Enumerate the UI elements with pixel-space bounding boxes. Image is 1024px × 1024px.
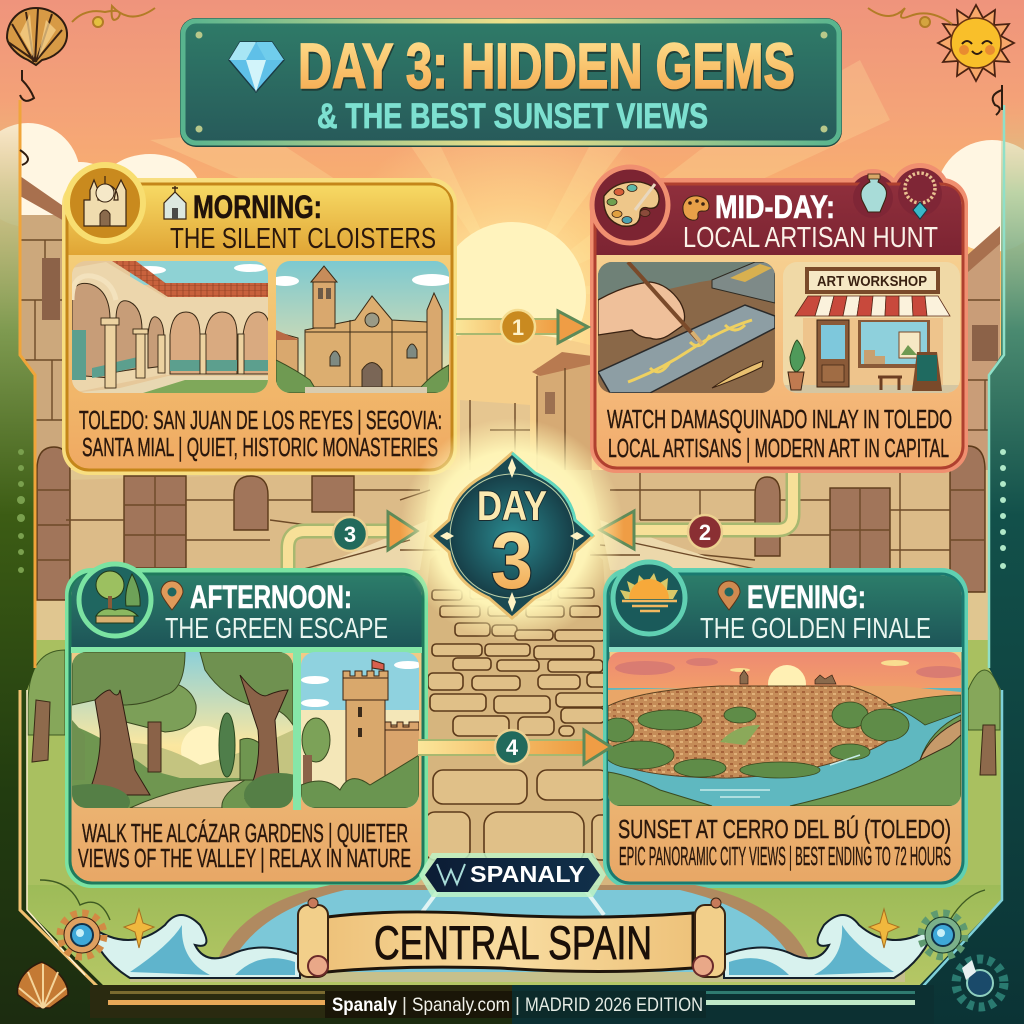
arrow 3 afternoon to centre <box>288 512 417 572</box>
decorative vine top right <box>868 8 1002 115</box>
arrow 4 afternoon to evening: 4 <box>506 735 519 760</box>
scroll banner: central spain: CENTRAL SPAIN <box>374 916 652 969</box>
caption <box>79 405 442 462</box>
arrow 4 afternoon to evening <box>418 730 611 764</box>
icon: small palette <box>683 196 709 220</box>
icon: shell bottom left <box>17 962 68 1008</box>
icon: smiling sun top right <box>938 5 1014 81</box>
image: inlay craft <box>598 262 775 393</box>
arrow 1 morning to mid-day <box>456 310 588 344</box>
image: church <box>271 261 452 393</box>
image: garden path <box>72 652 293 808</box>
image: cloister <box>72 261 273 393</box>
icon: palette badge <box>592 167 668 243</box>
icon: star right <box>869 909 899 948</box>
footer credits: | <box>515 995 520 1016</box>
waves right <box>724 915 936 978</box>
subtitle text: & THE BEST SUNSET VIEWS <box>317 97 708 136</box>
icon: necklace <box>905 173 935 219</box>
icon: cathedral badge <box>67 165 143 241</box>
panel: evening <box>602 562 968 888</box>
caption: SANTA MIAL | QUIET, HISTORIC MONASTERIES <box>82 432 438 462</box>
icon: gear right <box>922 914 964 956</box>
arrow 1 morning to mid-day: 1 <box>512 315 524 340</box>
arrow 2 mid-day to centre: 2 <box>699 520 711 545</box>
panel: morning: THE SILENT CLOISTERS <box>170 223 436 255</box>
water arcs behind banner <box>130 885 905 982</box>
arrow 2 mid-day to centre <box>600 472 793 549</box>
icon: gear bottom right <box>956 959 1004 1007</box>
image: castle tower <box>301 652 425 808</box>
frame: right border <box>915 100 1024 1024</box>
caption: WALK THE ALCÁZAR GARDENS | QUIETER <box>82 818 408 848</box>
centre badge: day 3 <box>400 418 624 642</box>
logo: spanaly badge <box>419 853 606 897</box>
footer credits: Spanaly <box>332 995 397 1016</box>
panel: afternoon <box>50 564 428 888</box>
heading: MORNING: <box>193 189 322 225</box>
panel: mid-day <box>590 163 968 473</box>
footer credits: Spanaly.com <box>412 995 510 1016</box>
footer credits: | <box>402 995 407 1016</box>
icon: map pin <box>161 581 183 610</box>
frame: bottom band <box>0 985 934 1024</box>
icon: map pin <box>718 581 740 610</box>
heading: MID-DAY: <box>715 189 835 225</box>
caption <box>78 818 411 873</box>
image: toledo panorama <box>602 652 964 806</box>
icon: trees badge <box>79 564 151 636</box>
icon: star left <box>124 909 154 948</box>
icon: scallop shell top left <box>7 8 67 65</box>
image: art workshop: ART WORKSHOP <box>817 273 927 290</box>
caption <box>618 814 951 871</box>
icon: diamond <box>229 42 284 92</box>
icon: gear left <box>61 914 103 956</box>
title text: DAY 3: HIDDEN GEMS <box>298 30 795 102</box>
panel: mid-day: LOCAL ARTISAN HUNT <box>683 222 938 254</box>
arrow 3 afternoon to centre: 3 <box>344 522 356 547</box>
centre badge: day 3: 3 <box>491 516 533 605</box>
heading: EVENING: <box>747 579 866 615</box>
panel: afternoon: THE GREEN ESCAPE <box>165 613 388 645</box>
image: art workshop <box>783 262 960 393</box>
title banner <box>180 18 842 147</box>
caption: TOLEDO: SAN JUAN DE LOS REYES | SEGOVIA: <box>79 405 442 435</box>
footer credits: MADRID 2026 EDITION <box>525 995 703 1016</box>
icon: sunset badge <box>613 562 685 634</box>
centre badge: day 3: DAY <box>477 482 547 529</box>
heading: AFTERNOON: <box>190 579 352 615</box>
panel: morning <box>62 165 457 475</box>
icon: vase <box>861 174 886 212</box>
frame: left border <box>0 100 108 1024</box>
scroll banner: central spain <box>298 898 725 977</box>
waves left <box>88 915 300 978</box>
caption <box>607 404 952 463</box>
icon: small church <box>164 186 186 219</box>
logo: spanaly badge: SPANALY <box>470 861 585 887</box>
footer credits <box>325 991 706 1018</box>
caption: VIEWS OF THE VALLEY | RELAX IN NATURE <box>78 843 411 873</box>
panel: evening: THE GOLDEN FINALE <box>700 613 931 645</box>
decorative vine top left <box>20 6 155 165</box>
